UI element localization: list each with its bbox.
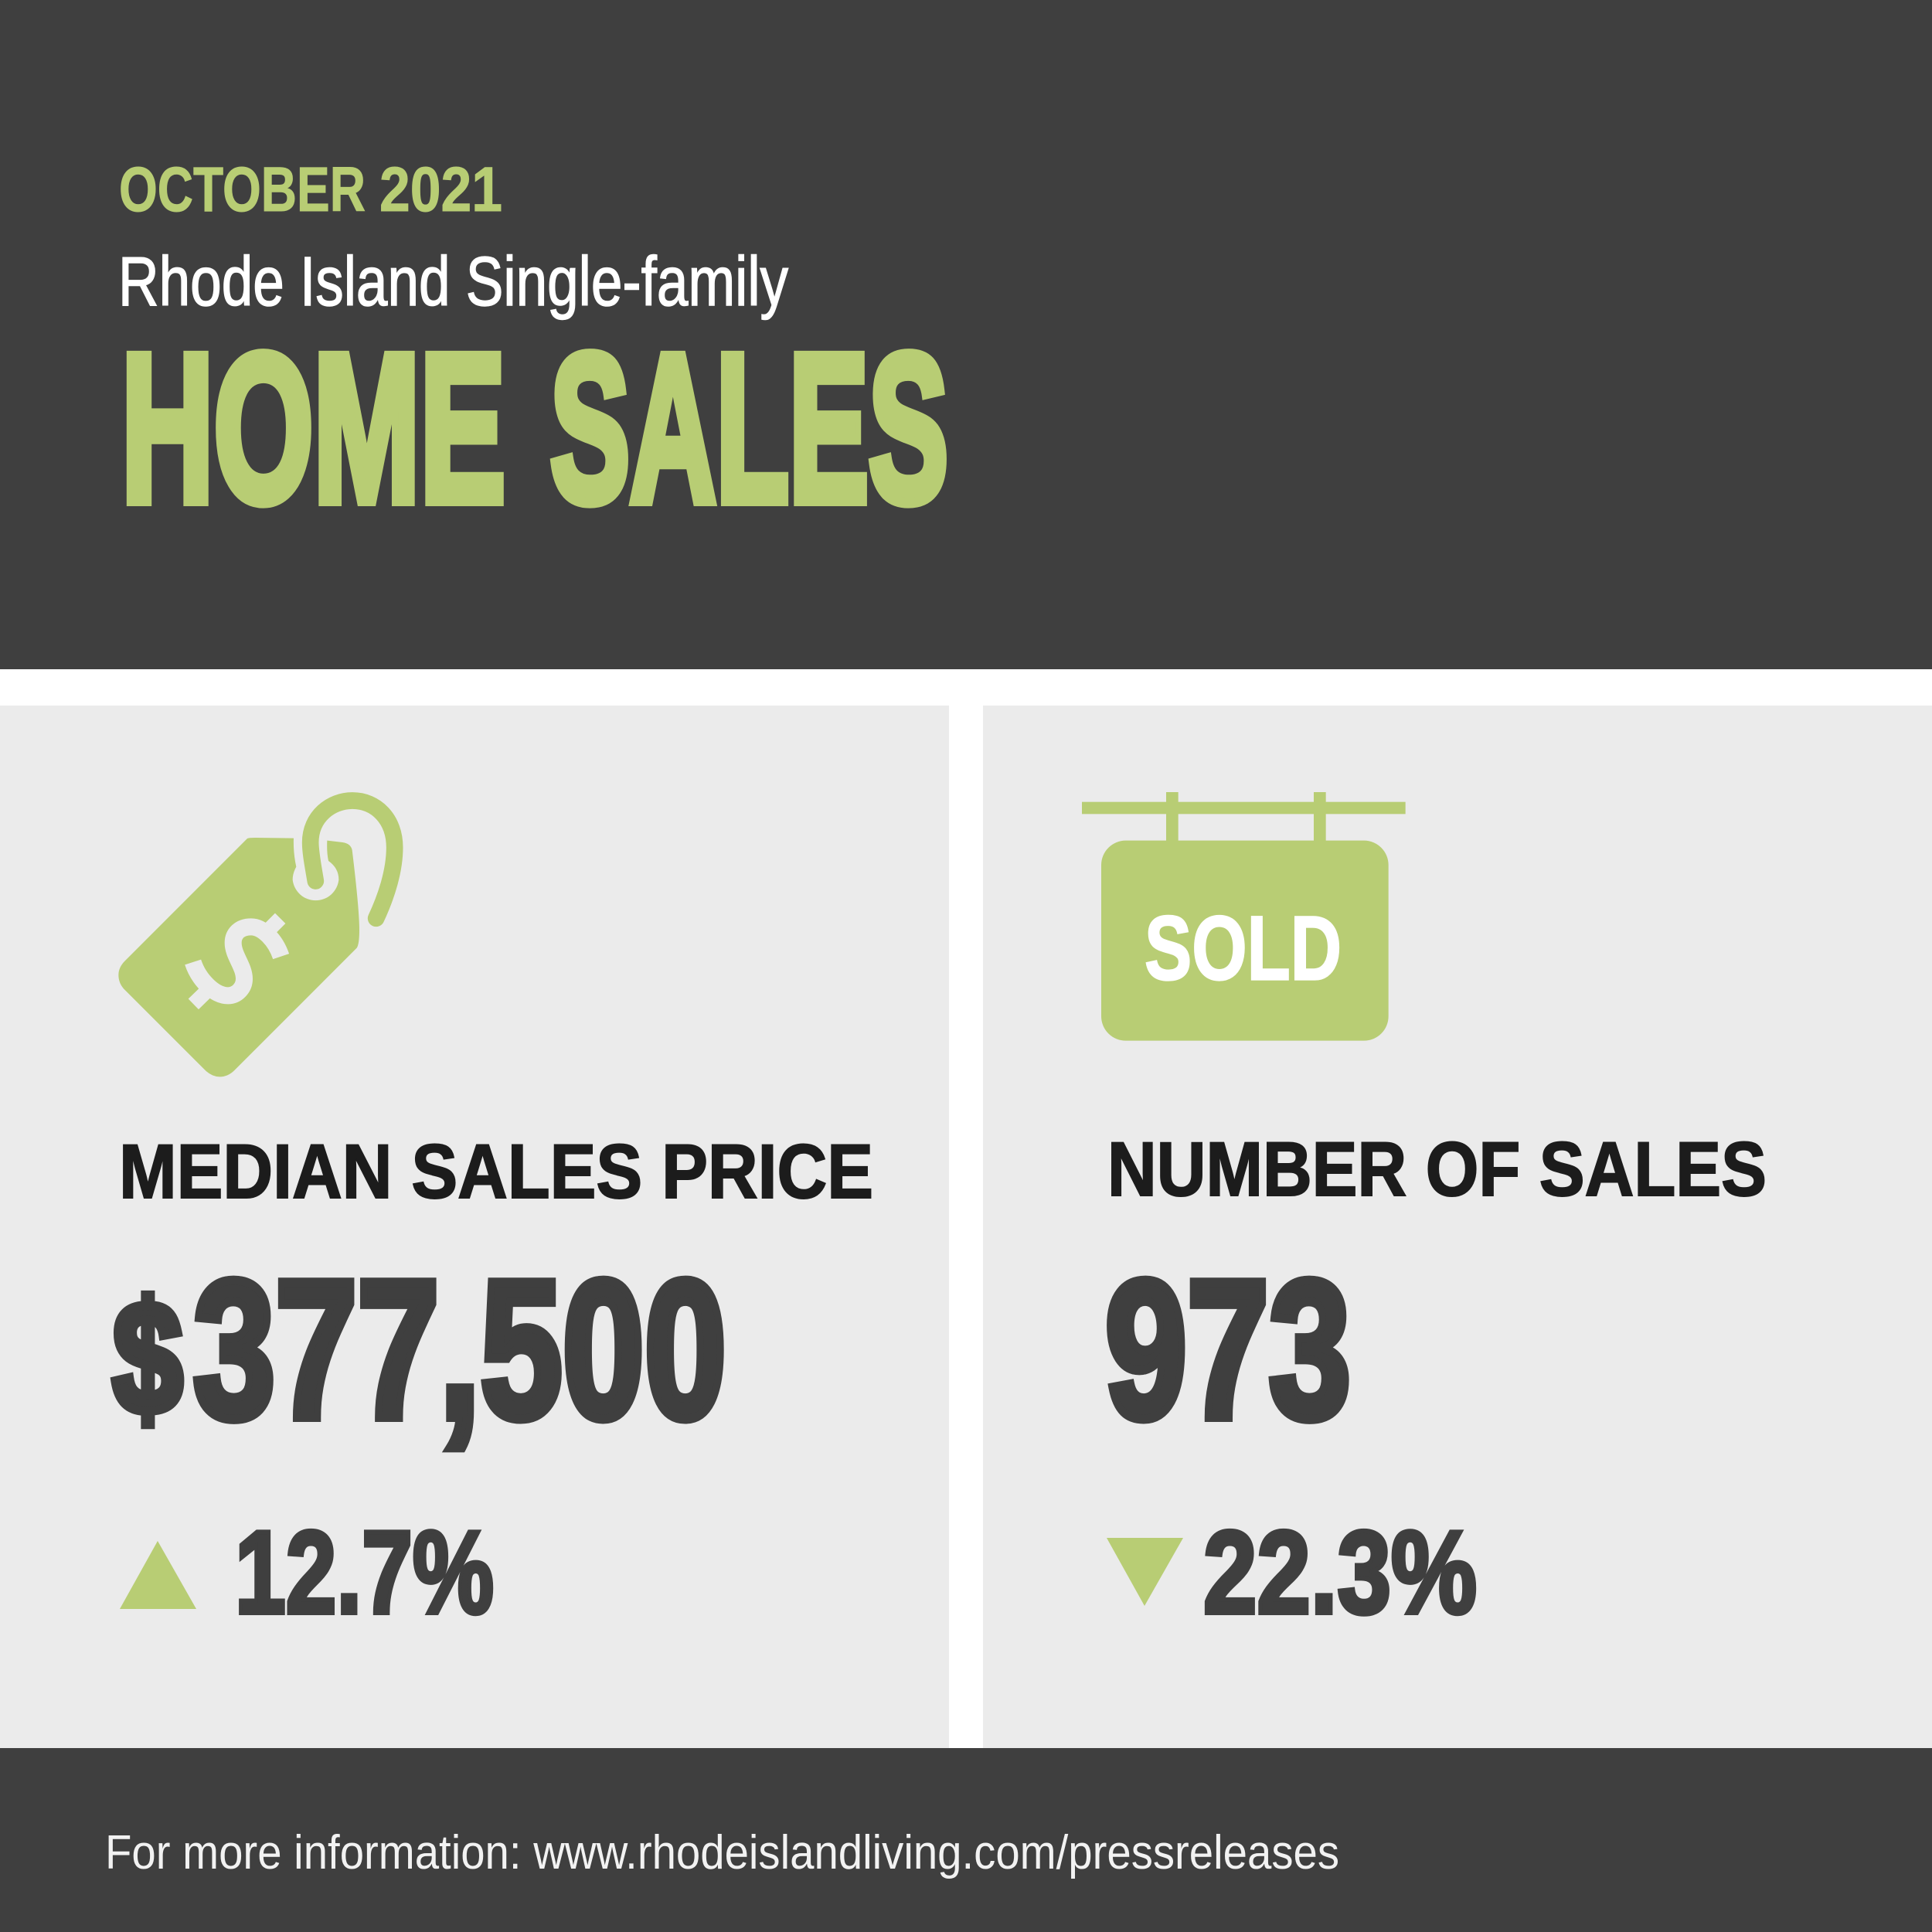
heading: median sales price: MEDIAN SALES PRICE bbox=[119, 1128, 873, 1214]
value: sales change: 22.3% bbox=[1203, 1507, 1477, 1638]
date label: OCTOBER bbox=[119, 155, 366, 225]
icon: sold sign bbox=[1082, 792, 1406, 1041]
panel: median sales price bbox=[0, 706, 949, 1748]
date label: 2021 bbox=[379, 155, 502, 225]
panel: header bbox=[0, 0, 1932, 669]
title: HOME bbox=[121, 311, 505, 546]
title: SALES bbox=[550, 311, 948, 546]
value: median sales price bbox=[113, 1240, 726, 1459]
dollar sign: $ bbox=[113, 1270, 182, 1447]
value: number of sales: 973 bbox=[1105, 1240, 1351, 1459]
footer link text: For more information: www.rhodeislandliving.com/pressreleases bbox=[105, 1826, 1339, 1879]
icon: down arrow bbox=[1107, 1538, 1183, 1606]
digits: 377,500 bbox=[193, 1240, 726, 1459]
panel: number of sales bbox=[983, 706, 1932, 1748]
icon: price tag bbox=[118, 801, 395, 1077]
heading: number of sales: NUMBER OF SALES bbox=[1107, 1126, 1767, 1212]
panel: footer bbox=[0, 1748, 1932, 1932]
icon: sold sign: SOLD bbox=[1145, 898, 1342, 1000]
subtitle: Rhode Island Single-family bbox=[118, 243, 788, 321]
icon: up arrow bbox=[120, 1541, 196, 1609]
value: price change: 12.7% bbox=[235, 1507, 494, 1638]
